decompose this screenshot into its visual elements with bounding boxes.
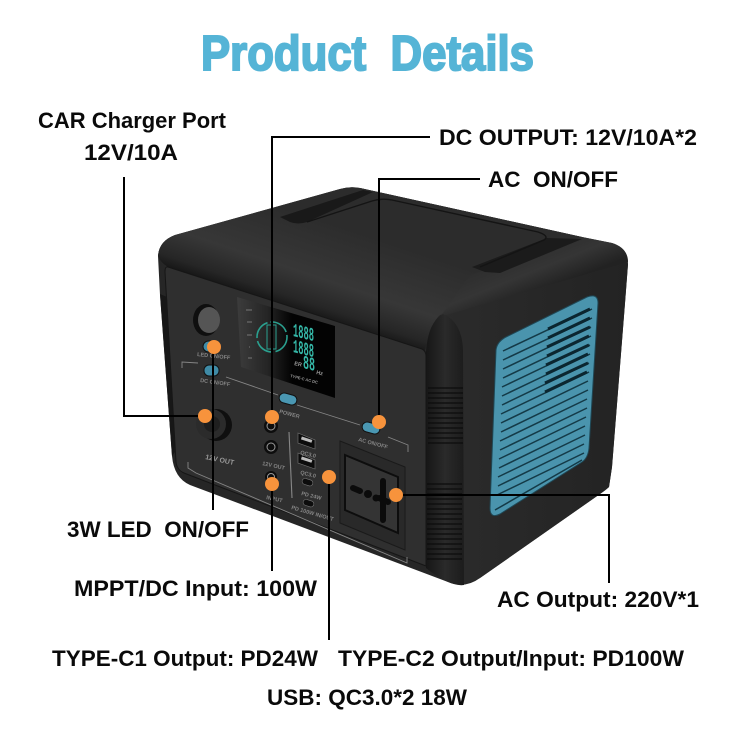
panel bracket lines [182,362,408,563]
label: USB: USB: QC3.0*2 18W [267,685,467,710]
label: LED on/off: 3W LED ON/OFF [67,517,249,542]
left ribbed grip [160,294,175,456]
side face [443,255,628,585]
USB ports column [289,432,335,523]
label: Type-C2: TYPE-C2 Output/Input: PD100W [338,646,684,671]
AC label: AC ON/OFF [357,437,389,451]
12V OUT label: 12V OUT [205,454,235,467]
body silhouette [158,187,628,585]
LCD display: 1888 [293,336,314,363]
LED lamp [193,304,220,336]
product: power station: INPUT [266,495,284,505]
LED switch [203,341,220,352]
DC label: DC ON/OFF [200,378,231,388]
leader lines [124,137,609,640]
front panel [165,267,426,566]
USB ports column: PD 24W [301,491,323,502]
top face [158,187,582,350]
USB ports column: QC3.0 [300,470,316,480]
AC button [361,421,381,435]
USB ports column: PD 100W IN/OUT [290,505,335,523]
LED label: LED ON/OFF [197,352,231,362]
top handle recess right [472,238,582,273]
callout dots [198,340,403,502]
LCD battery ring [257,322,287,352]
DC switch [204,365,219,376]
USB ports column: QC3.0 [300,450,316,460]
jack labels: 12V OUT [262,461,286,472]
LCD display: Hz [316,370,324,377]
power button [278,392,298,406]
LCD display [237,297,335,398]
top handle recess left [280,190,373,224]
top panel outline [307,199,546,267]
LCD display: 1888 [293,320,314,347]
label: Type-C1: TYPE-C1 Output: PD24W [52,646,318,671]
product: power station [158,187,628,585]
car charger port [196,409,232,441]
title: Product Details [201,26,534,81]
label: AC on/off: AC ON/OFF [488,167,618,192]
label: AC output: AC Output: 220V*1 [497,587,699,612]
DC jacks [264,419,278,483]
power label: POWER [278,409,300,420]
LCD icons [246,310,252,358]
label: MPPT input: MPPT/DC Input: 100W [74,576,317,601]
label: car charger rating: 12V/10A [84,140,178,165]
side vent: teal grille [490,296,598,516]
LCD display: ER [294,361,302,369]
label: DC output: DC OUTPUT: 12V/10A*2 [439,125,697,150]
front right corner column [426,314,464,585]
LCD display: TYPE-C AC DC [290,373,319,385]
AC outlet [340,441,405,550]
ribbed grip stripes [427,388,463,559]
LCD display: 88 [303,352,315,377]
label: car charger port: CAR Charger Port [38,108,227,133]
top face right part [360,188,628,316]
